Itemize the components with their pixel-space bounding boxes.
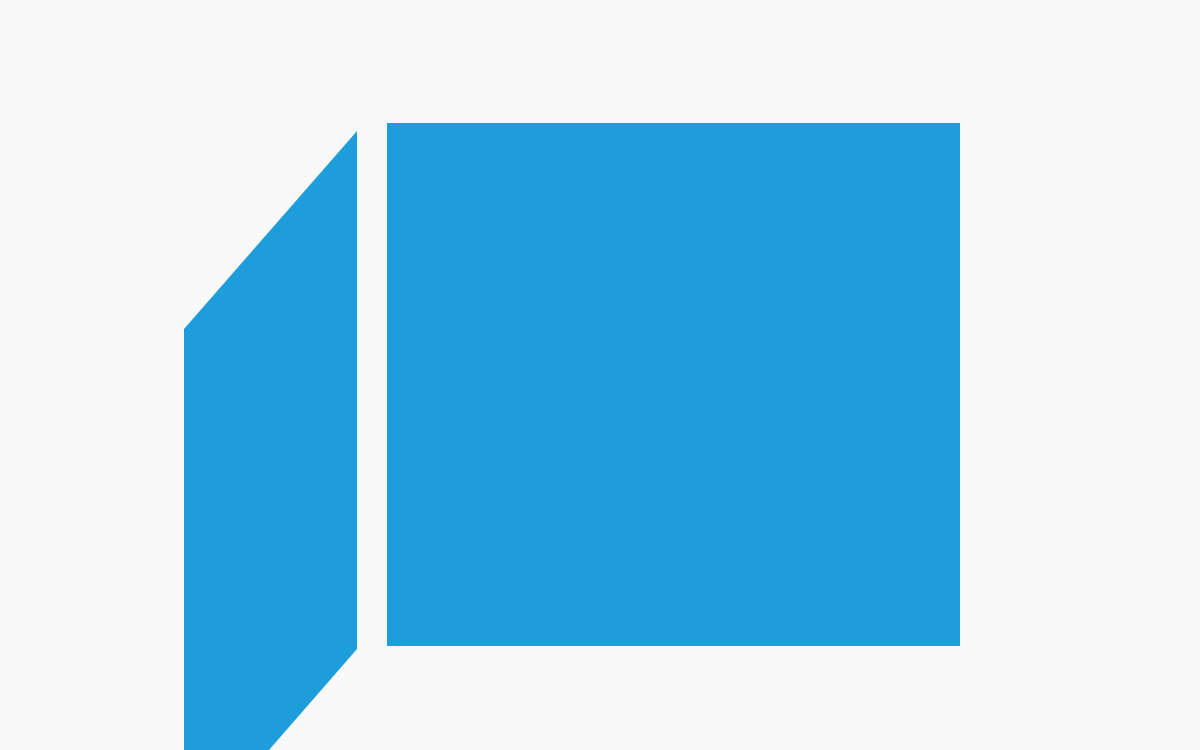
left slanted panel (184, 131, 357, 750)
right rectangle panel (387, 123, 960, 646)
